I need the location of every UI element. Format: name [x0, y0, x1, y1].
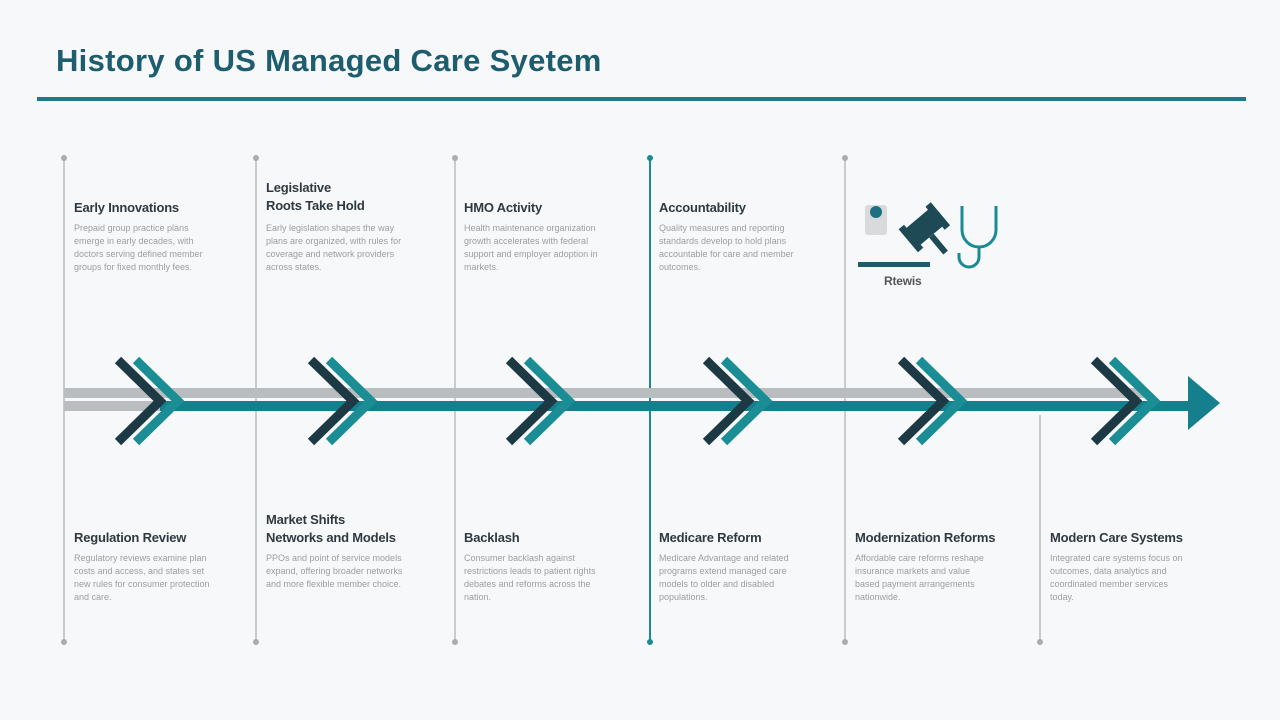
- text: Health maintenance organization growth accelerates with federal support and employer adoption in markets.: [464, 223, 598, 272]
- text: Networks and Models: [266, 530, 396, 545]
- text: Regulatory reviews examine plan costs and access, and states set new rules for consumer protection and care.: [74, 553, 210, 602]
- icon group: law and medicine: [858, 202, 996, 267]
- text: PPOs and point of service models expand, offering broader networks and more flexible member choice.: [266, 553, 402, 589]
- text: Medicare Reform: [659, 530, 761, 545]
- text: Medicare Advantage and related programs extend managed care models to older and disabled populations.: [659, 553, 789, 602]
- text: Accountability: [659, 200, 746, 215]
- text: HMO Activity: [464, 200, 542, 215]
- text: Legislative: [266, 180, 331, 195]
- text: Roots Take Hold: [266, 198, 365, 213]
- text: Integrated care systems focus on outcomes, data analytics and coordinated member services today.: [1050, 553, 1183, 602]
- text: Modern Care Systems: [1050, 530, 1183, 545]
- text: Early legislation shapes the way plans are organized, with rules for coverage and network providers across states.: [266, 223, 401, 272]
- title: History of US Managed Care Syetem: [56, 43, 602, 78]
- text: Backlash: [464, 530, 520, 545]
- text: Prepaid group practice plans emerge in early decades, with doctors serving defined member groups for fixed monthly fees.: [74, 223, 203, 272]
- text: Market Shifts: [266, 512, 345, 527]
- chevrons: [118, 360, 1154, 442]
- title underline: [37, 97, 1246, 101]
- bottom events: Regulation Review: [74, 530, 186, 545]
- track: [64, 388, 1144, 398]
- top events: Early Innovations: [74, 200, 179, 215]
- icon label: Rtewis: [884, 274, 921, 288]
- text: Quality measures and reporting standards develop to hold plans accountable for care and member outcomes.: [659, 223, 794, 272]
- text: Modernization Reforms: [855, 530, 995, 545]
- text: Consumer backlash against restrictions leads to patient rights debates and reforms across the nation.: [464, 553, 596, 602]
- text: Affordable care reforms reshape insurance markets and value based payment arrangements nationwide.: [855, 553, 984, 602]
